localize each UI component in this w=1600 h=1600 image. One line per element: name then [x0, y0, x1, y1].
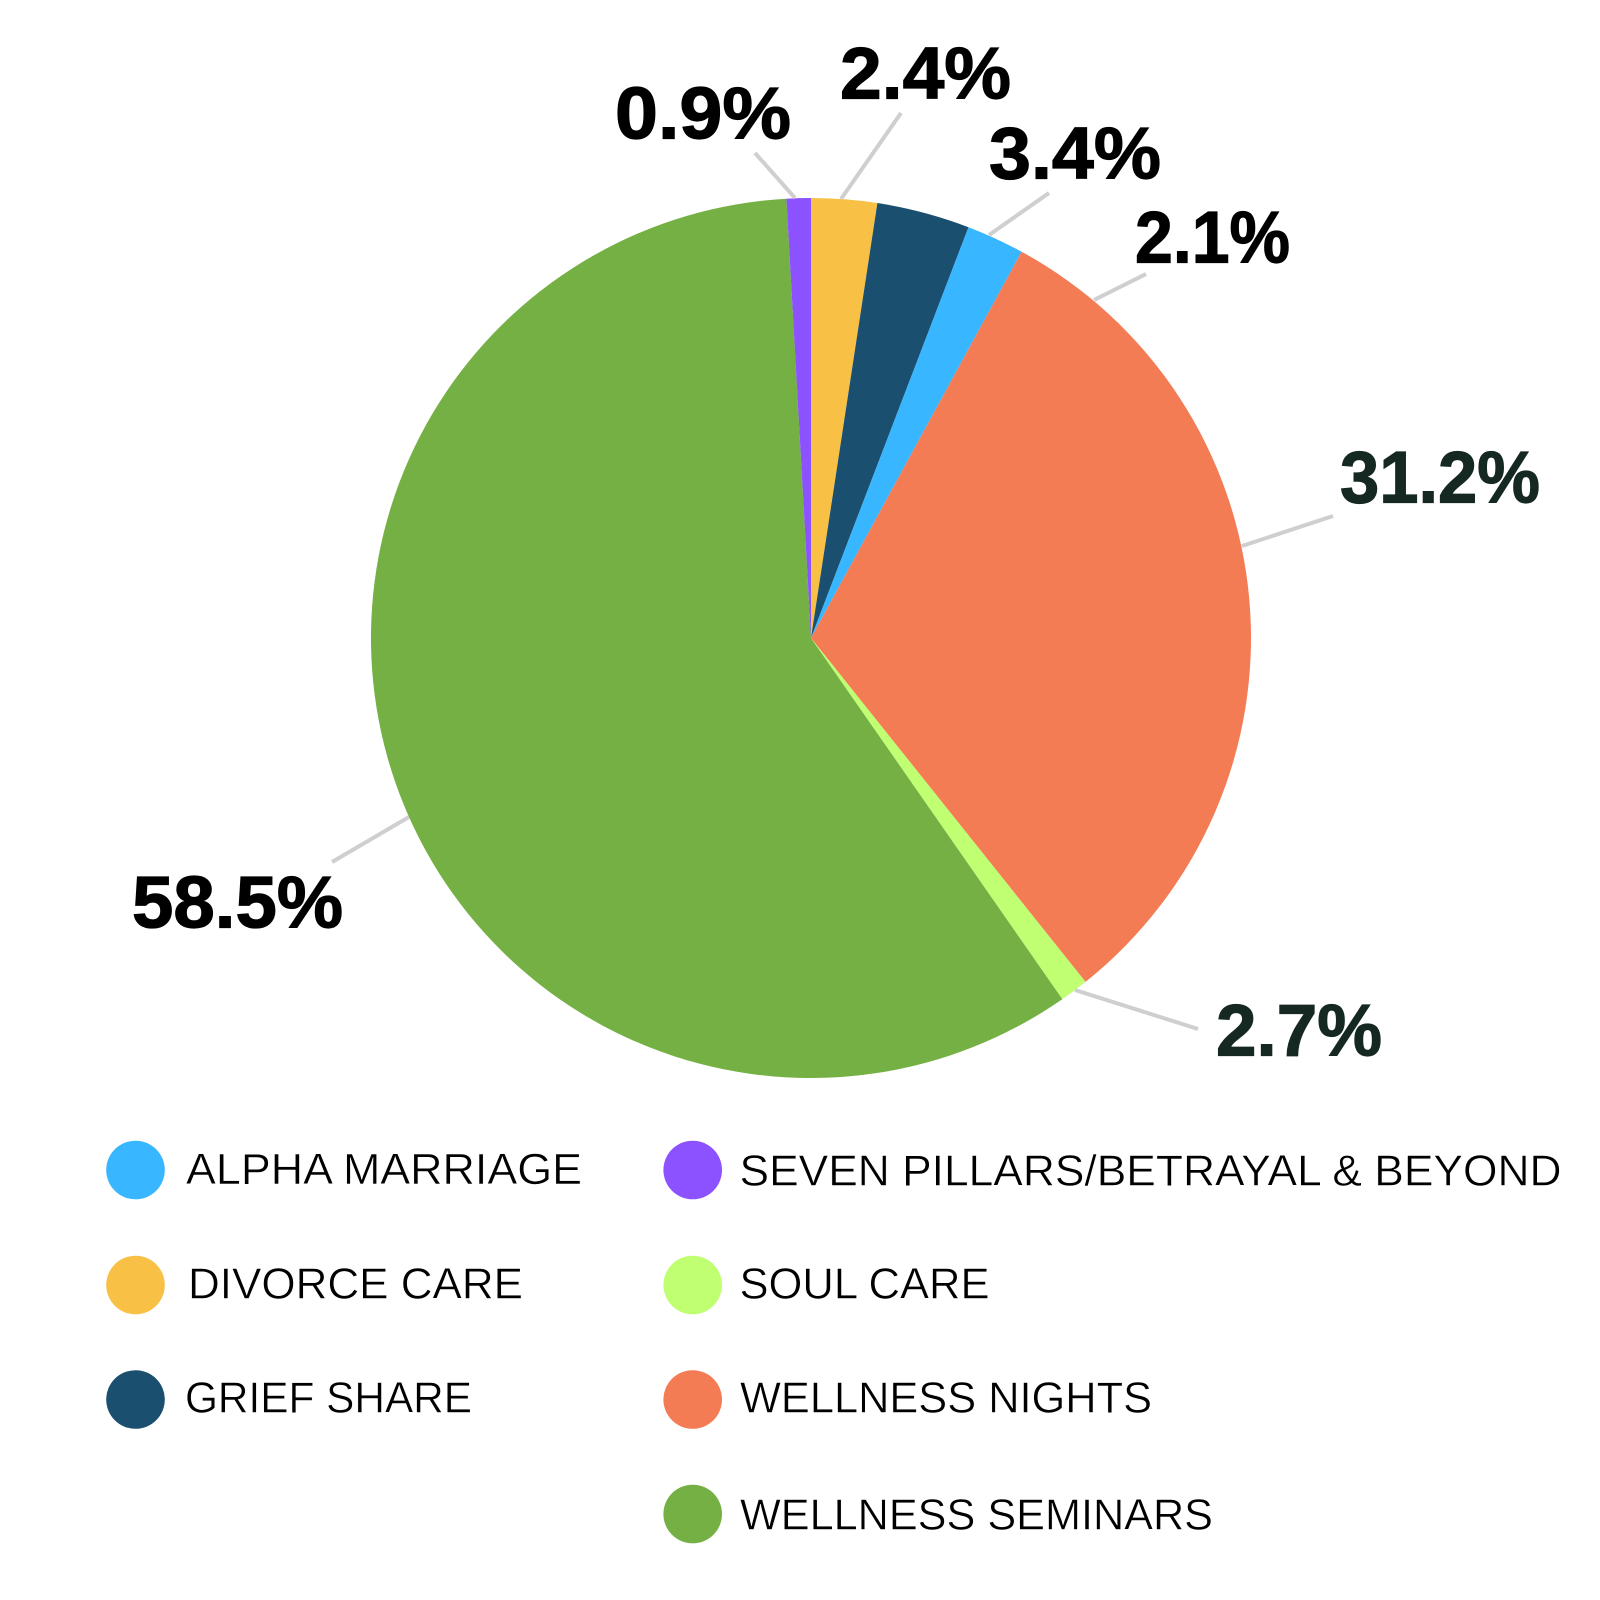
leader line: 2.1%	[1094, 274, 1146, 300]
legend item: divorce care: DIVORCE CARE	[188, 1260, 523, 1308]
legend item: wellness nights: WELLNESS NIGHTS	[740, 1374, 1152, 1422]
value label: 2.7%: 2.7%	[1216, 990, 1382, 1072]
leader line: 58.5%	[332, 817, 409, 862]
value label: 2.1%: 2.1%	[1135, 198, 1290, 278]
leader line: 2.7%	[1075, 990, 1198, 1029]
leader line: 0.9%	[755, 153, 795, 198]
leader line: 31.2%	[1242, 516, 1333, 546]
legend	[106, 1141, 1562, 1543]
slice: soul care 2.7%	[811, 638, 1086, 999]
slice: wellness seminars 58.5%	[371, 199, 1062, 1078]
leader line: 2.4%	[841, 113, 901, 199]
leader line: 3.4%	[989, 193, 1049, 235]
slice: alpha marriage 2.1%	[811, 227, 1022, 638]
legend item: grief share: GRIEF SHARE	[185, 1374, 472, 1422]
value label: 2.4%: 2.4%	[840, 34, 1011, 114]
legend item: soul care: SOUL CARE	[740, 1260, 990, 1308]
legend item: wellness nights	[663, 1370, 1152, 1429]
slice: seven pillars 0.9%	[786, 198, 811, 638]
value label: 3.4%: 3.4%	[989, 114, 1161, 194]
legend item: seven pillars / betrayal and beyond: SEVEN PILLARS/BETRAYAL & BEYOND	[740, 1146, 1562, 1196]
legend item: grief share	[106, 1370, 472, 1429]
value label: 31.2%: 31.2%	[1340, 438, 1540, 518]
legend item: divorce care	[106, 1256, 523, 1314]
slice: divorce care 2.4%	[811, 198, 877, 638]
value label: 0.9%: 0.9%	[615, 74, 791, 154]
slice: wellness nights 31.2%	[811, 252, 1251, 982]
legend item: soul care	[663, 1256, 990, 1314]
slice: grief share 3.4%	[811, 203, 968, 638]
value label: 58.5%: 58.5%	[132, 862, 343, 944]
legend item: wellness seminars: WELLNESS SEMINARS	[740, 1490, 1213, 1540]
legend item: alpha marriage	[106, 1141, 582, 1199]
legend item: alpha marriage: ALPHA MARRIAGE	[186, 1145, 582, 1194]
pie chart	[371, 198, 1251, 1078]
